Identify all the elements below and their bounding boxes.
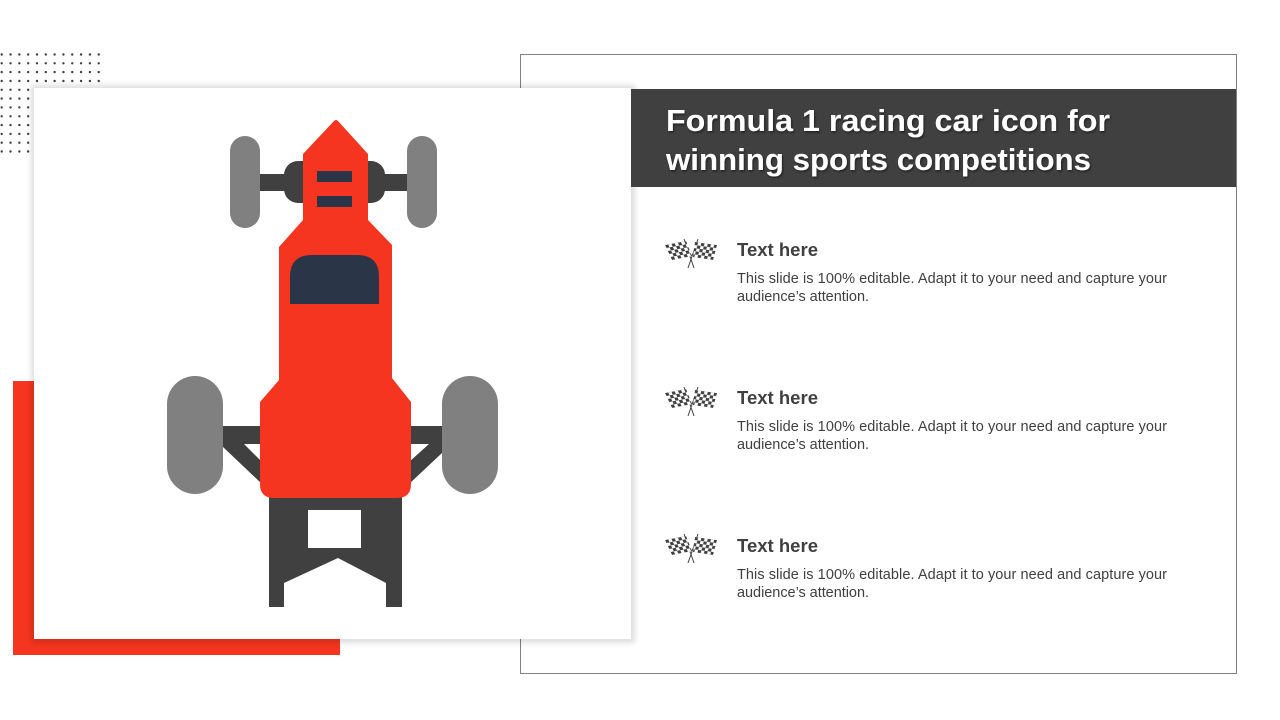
icon: checkered flags — [665, 534, 717, 563]
car body — [260, 120, 411, 498]
item 1 — [665, 239, 1167, 305]
right rear suspension — [409, 426, 442, 484]
rear right wheel — [442, 376, 498, 494]
item heading: Text here — [737, 240, 818, 260]
item description: audience’s attention. — [737, 437, 869, 453]
item heading: Text here — [737, 388, 818, 408]
rear wing cut-out — [308, 510, 361, 548]
item 2 — [665, 387, 1167, 453]
item description: audience’s attention. — [737, 585, 869, 601]
banner background — [631, 89, 1236, 187]
front left wheel — [230, 136, 260, 228]
item 3 — [665, 534, 1167, 601]
red accent frame — [13, 381, 340, 655]
rear left wheel — [167, 376, 223, 494]
nose slot bottom — [317, 196, 352, 207]
item description — [737, 419, 1167, 453]
item description — [737, 271, 1167, 305]
title text: Formula 1 racing car icon for — [666, 103, 1110, 138]
title banner — [631, 89, 1236, 187]
left rear suspension — [223, 426, 262, 484]
racing car illustration — [167, 120, 498, 607]
dot pattern — [2, 54, 100, 152]
item description: This slide is 100% editable. Adapt it to your need and capture your — [737, 419, 1167, 435]
icon: checkered flags — [665, 239, 717, 268]
white image panel — [34, 88, 631, 639]
outlined content frame — [520, 54, 1236, 674]
title text — [665, 103, 1110, 177]
item heading: Text here — [737, 536, 818, 556]
title text: winning sports competitions — [665, 142, 1091, 177]
item description — [737, 567, 1167, 601]
front axle — [260, 174, 407, 191]
front right wheel — [407, 136, 437, 228]
item description: audience’s attention. — [737, 289, 869, 305]
panel shadow — [31, 85, 635, 643]
item description: This slide is 100% editable. Adapt it to your need and capture your — [737, 567, 1167, 583]
icon: checkered flags — [665, 387, 717, 416]
cockpit — [290, 255, 379, 304]
nose slot top — [317, 171, 352, 182]
axle hub — [284, 161, 385, 203]
rear wing — [269, 490, 402, 607]
item description: This slide is 100% editable. Adapt it to your need and capture your — [737, 271, 1167, 287]
